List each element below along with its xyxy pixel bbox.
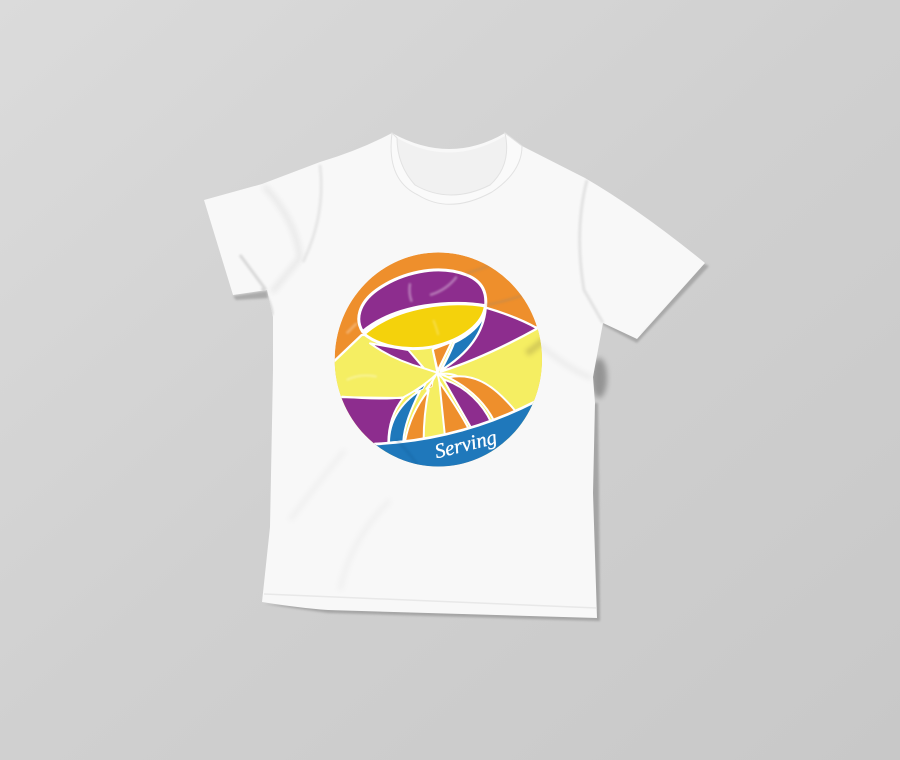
print: centre slivers (415, 379, 433, 392)
print: centre star lines (342, 342, 457, 399)
print: small purple wedge (370, 343, 424, 368)
print: lower left purple (341, 396, 406, 448)
shirt wrinkles and seams (239, 165, 604, 608)
print: orange top area (335, 252, 542, 466)
print: Serving script label: Serving (433, 427, 499, 463)
circular print (334, 252, 542, 466)
shirt drop shadow (233, 262, 709, 621)
print: small orange wedge (433, 342, 452, 371)
print: blue sliver (441, 308, 486, 371)
print: blue bottom band (374, 400, 534, 466)
t-shirt body (204, 133, 705, 618)
print: lower purple stripe (443, 379, 491, 429)
print: right orange stripe (448, 376, 516, 421)
t-shirt mockup scene (0, 0, 709, 622)
print: lower blue stripe (389, 391, 420, 443)
print: lower orange stripe (405, 390, 429, 441)
print: pale yellow band (327, 327, 553, 457)
print: purple top of cup (359, 270, 486, 332)
print: fabric creases over the print (347, 263, 543, 470)
print: yellow cup ellipse (364, 304, 485, 349)
print: centre orange stripe (439, 382, 470, 437)
collar (391, 133, 522, 204)
print: right purple wedge (441, 308, 537, 372)
